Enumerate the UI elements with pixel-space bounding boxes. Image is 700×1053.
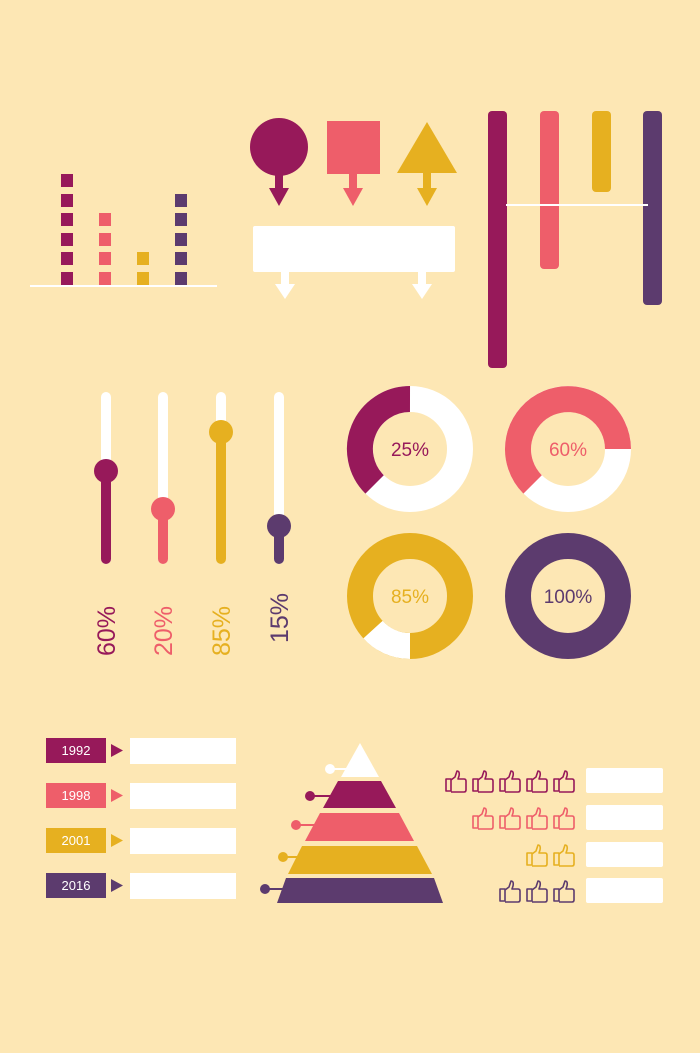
ratings: thumbs <box>446 768 663 903</box>
slider labels <box>93 593 294 656</box>
donut 85% <box>360 546 460 646</box>
sliders <box>94 392 291 564</box>
timeline: 1998 <box>62 788 90 803</box>
timeline: 1992 <box>62 743 90 758</box>
donut 100%: 100% <box>544 587 592 608</box>
slider labels: 85% <box>208 606 236 656</box>
slider labels: 20% <box>150 606 178 656</box>
timeline <box>46 738 236 899</box>
white box with arrows <box>253 226 455 299</box>
timeline: 2001 <box>62 833 90 848</box>
donut 25%: 25% <box>391 440 429 461</box>
timeline: 2016 <box>62 878 90 893</box>
icon: square with arrow <box>327 121 380 206</box>
icon: circle with arrow <box>250 118 308 206</box>
donut 25% <box>360 399 460 499</box>
donut 85%: 85% <box>391 587 429 608</box>
donut 60%: 60% <box>549 440 587 461</box>
slider labels: 60% <box>93 606 121 656</box>
donut 60% <box>518 399 618 499</box>
pyramid <box>260 743 443 903</box>
vertical bars <box>488 111 662 368</box>
bar chart: stacked squares <box>30 174 217 287</box>
slider labels: 15% <box>266 593 294 643</box>
icon: triangle with double arrow <box>397 122 457 206</box>
donut 100% <box>518 546 618 646</box>
